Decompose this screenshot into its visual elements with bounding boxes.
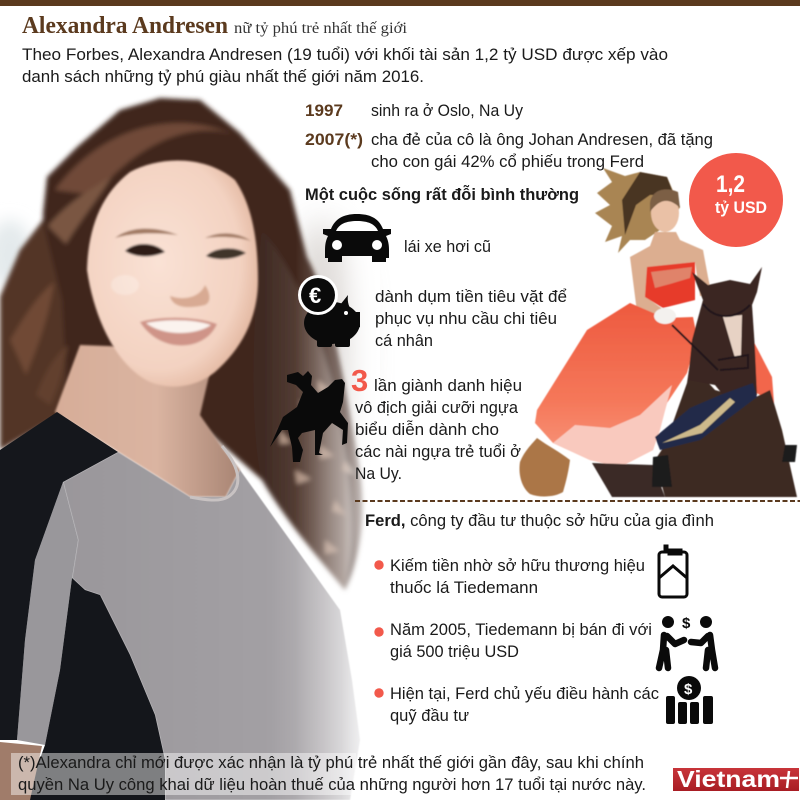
bullet: investment funds — [374, 685, 659, 725]
rider photo — [519, 168, 797, 497]
forearm — [0, 742, 42, 800]
bullet: Tiedemann brand: Kiếm tiền nhờ sở hữu thương hiệu — [390, 557, 645, 575]
rider hair — [595, 168, 680, 253]
boot — [652, 455, 672, 487]
top brown bar — [0, 0, 800, 6]
bridle — [672, 304, 750, 370]
icon: car — [323, 214, 391, 262]
icon: piggy bank with euro: € — [309, 283, 321, 308]
text: three titles: Na Uy. — [355, 465, 402, 483]
value badge: 1,2 tỷ USD — [689, 153, 783, 247]
text: savings: dành dụm tiền tiêu vặt để — [375, 288, 567, 306]
horse head and neck — [688, 267, 762, 400]
intro text: danh sách những tỷ phú giàu nhất thế giới năm 2016. — [22, 68, 424, 86]
text: savings: phục vụ nhu cầu chi tiêu — [375, 310, 557, 328]
text: savings — [375, 288, 567, 350]
portrait photo — [0, 90, 380, 800]
red dress skirt right — [735, 325, 774, 403]
text: three titles: 3 — [351, 363, 368, 398]
horse body — [655, 363, 797, 497]
text: three titles: các nài ngựa trẻ tuổi ở — [355, 443, 521, 461]
mouth — [140, 318, 217, 346]
bullet: sold 2005: Năm 2005, Tiedemann bị bán đi với — [390, 621, 652, 639]
title — [22, 13, 408, 39]
bullet: Tiedemann brand: thuốc lá Tiedemann — [390, 579, 538, 597]
icon: horse rider — [270, 371, 348, 462]
text: old car: lái xe hơi cũ — [404, 238, 491, 256]
neck and chest skin — [55, 345, 240, 497]
red dress skirt — [535, 303, 697, 467]
shirt: black side panel — [25, 578, 165, 800]
icon: people exchanging money: $ — [682, 615, 691, 632]
right boot — [782, 445, 797, 462]
glove — [654, 308, 676, 324]
sash — [655, 383, 757, 450]
heading: normal life: Một cuộc sống rất đỗi bình thường — [305, 185, 579, 204]
timeline 2007: 2007(*) — [305, 131, 363, 149]
title: nữ tỷ phú trẻ nhất thế giới — [234, 20, 408, 37]
intro text: Theo Forbes, Alexandra Andresen (19 tuổi) với khối tài sản 1,2 tỷ USD được xếp vào — [22, 46, 668, 64]
footnote: (*)Alexandra chỉ mới được xác nhận là tỷ phú trẻ nhất thế giới gần đây, sau khi chính — [18, 754, 644, 772]
blaze — [723, 315, 742, 358]
cheek highlight — [111, 275, 139, 295]
rider face — [651, 194, 679, 232]
heading: Ferd: Ferd, công ty đầu tư thuộc sở hữu của gia đình — [365, 512, 714, 530]
shirt: grey sleeve — [17, 482, 78, 745]
timeline 2007: cha đẻ của cô là ông Johan Andresen, đã tặng — [371, 131, 713, 149]
timeline 1997 — [305, 102, 524, 120]
text: three titles: lần giành danh hiệu — [374, 377, 522, 395]
timeline 2007: cho con gái 42% cổ phiếu trong Ferd — [371, 153, 644, 171]
bullet: investment funds: Hiện tại, Ferd chủ yếu điều hành các — [390, 685, 659, 703]
bodice — [645, 262, 695, 308]
shirt: black shoulder — [0, 412, 118, 740]
text: three titles: vô địch giải cưỡi ngựa — [355, 399, 519, 417]
timeline 2007 — [305, 131, 713, 171]
value badge: 1,2 tỷ USD: 1,2 — [716, 171, 745, 198]
timeline 1997: 1997 — [305, 102, 343, 120]
intro text — [22, 46, 668, 86]
text: three titles: biểu diễn dành cho — [355, 420, 499, 439]
eyebrows — [115, 229, 178, 238]
face — [87, 161, 258, 387]
horse tail — [519, 438, 570, 496]
timeline 1997: sinh ra ở Oslo, Na Uy — [371, 102, 524, 120]
icon: people exchanging money — [659, 615, 715, 668]
soft background tone behind hair — [290, 220, 360, 480]
title: Alexandra Andresen — [22, 13, 228, 39]
footnote: quyền Na Uy công khai dữ liệu hoàn thuế của những người hơn 17 tuổi tại nước này. — [18, 776, 646, 794]
bullet: investment funds: quỹ đầu tư — [390, 707, 469, 725]
footnote — [11, 753, 646, 795]
text: savings: cá nhân — [375, 332, 433, 350]
icon: cigarette pack — [659, 545, 687, 597]
shirt: neckline trim — [190, 446, 238, 500]
text: three titles — [351, 363, 522, 483]
nose — [170, 285, 210, 307]
icon: piggy bank with euro — [298, 275, 360, 347]
hair: back mass — [0, 98, 363, 590]
rider shoulders and arms — [630, 232, 712, 320]
value badge: 1,2 tỷ USD: tỷ USD — [715, 199, 767, 217]
bullet: Tiedemann brand — [374, 557, 645, 597]
icon: investment fund bars — [666, 676, 713, 724]
bullet: sold 2005 — [374, 621, 652, 661]
eyes — [125, 244, 165, 256]
horse hind — [592, 463, 665, 497]
icon: investment fund bars: $ — [684, 681, 693, 698]
tulle — [553, 385, 672, 467]
right edge fade — [295, 90, 380, 800]
shirt: grey front — [63, 452, 360, 800]
logo: Vietnam+: Vietnam — [677, 766, 780, 792]
bullet: sold 2005: giá 500 triệu USD — [390, 643, 519, 661]
